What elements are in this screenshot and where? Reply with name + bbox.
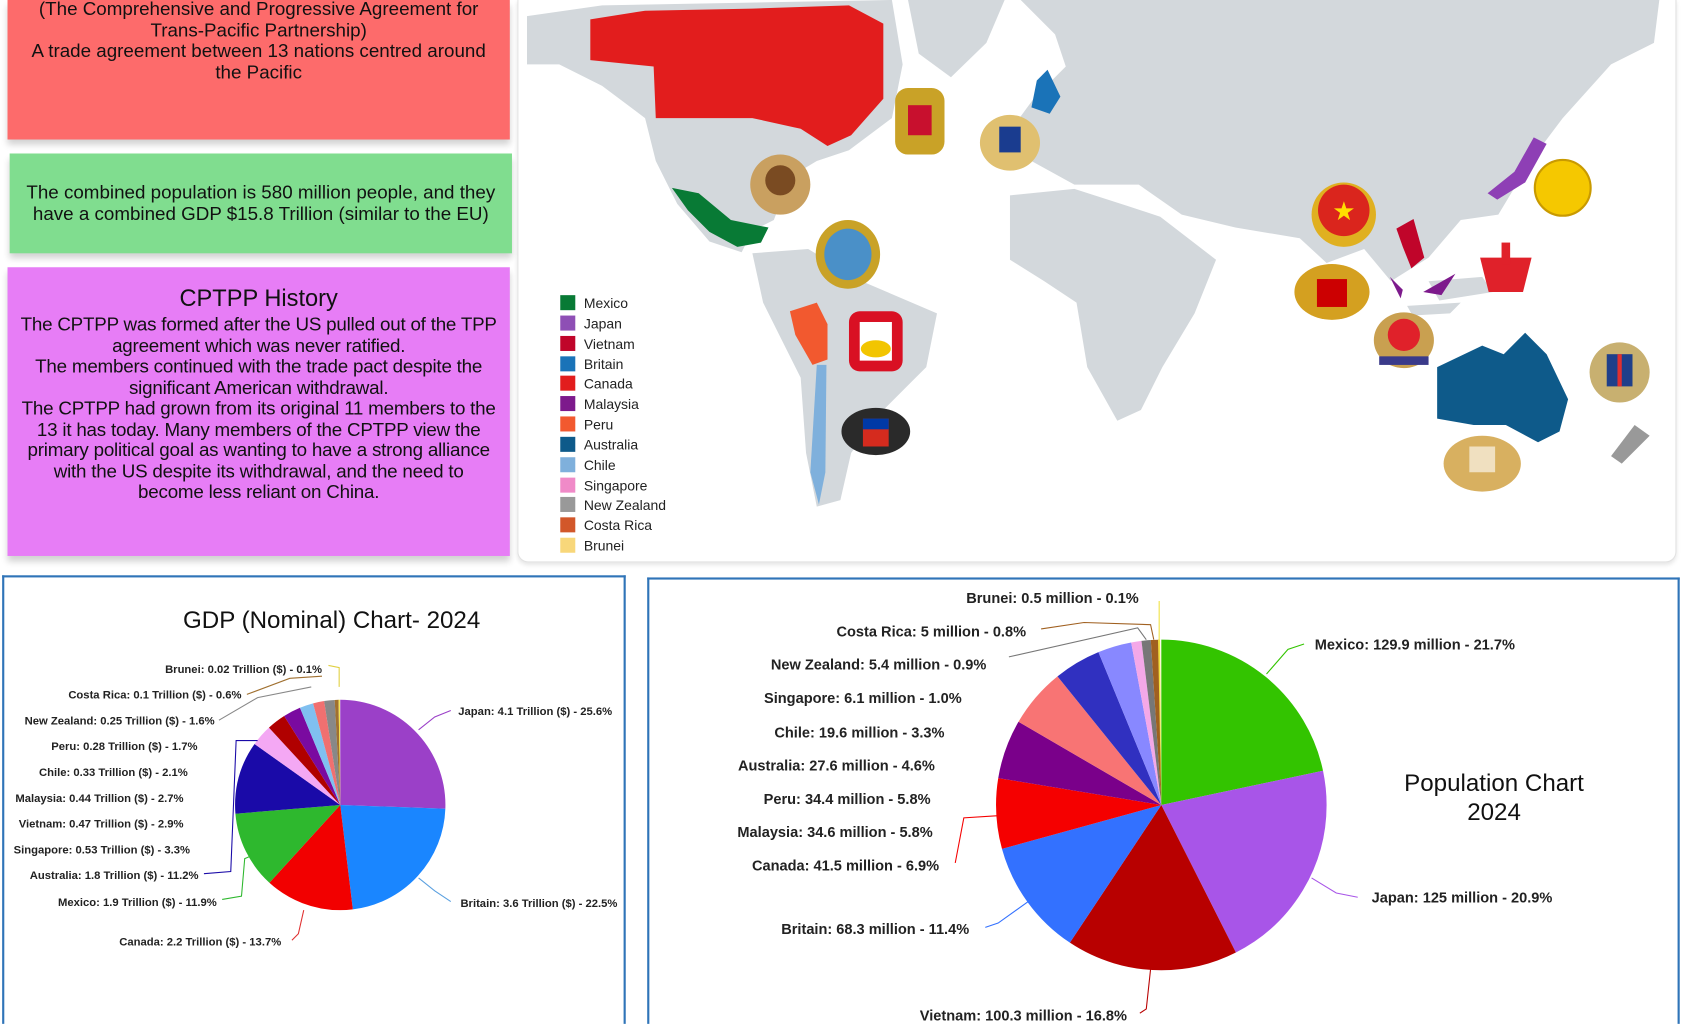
emblem: Brunei (1480, 243, 1532, 292)
legend: Canada (584, 376, 633, 392)
legend: Peru (584, 416, 613, 432)
labels GDP: Costa Rica: 0.1 Trillion ($) - 0.6% (68, 690, 241, 702)
country: Mexico (672, 188, 768, 247)
legend: Australia (584, 437, 638, 453)
labels population: Mexico: 129.9 million - 21.7% (1315, 637, 1515, 653)
emblems (750, 88, 1650, 492)
emblem: Australia (1444, 436, 1521, 492)
chart: GDP pie (288, 752, 393, 858)
country: Vietnam (1396, 219, 1424, 268)
text: history paragraph: significant American withdrawal. (129, 376, 388, 398)
emblem: UK (980, 115, 1040, 171)
text: history paragraph: The members continued with the trade pact despite the (35, 355, 482, 377)
emblem: Malaysia (1294, 264, 1370, 320)
leader lines GDP (204, 665, 451, 940)
country: Malaysia (1390, 274, 1455, 298)
text: history paragraph: primary political goal as wanting to have a strong alliance (27, 439, 490, 460)
panel: population and GDP summary (10, 153, 512, 253)
panel: population and GDP summary: have a combined GDP $15.8 Trillion (similar to the EU) (33, 202, 489, 224)
legend: Malaysia (584, 396, 639, 412)
labels GDP: Malaysia: 0.44 Trillion ($) - 2.7% (15, 793, 184, 805)
labels population: Chile: 19.6 million - 3.3% (774, 725, 945, 741)
labels GDP: Peru: 0.28 Trillion ($) - 1.7% (51, 741, 197, 753)
labels GDP: Japan: 4.1 Trillion ($) - 25.6% (458, 706, 612, 718)
labels population: New Zealand: 5.4 million - 0.9% (771, 658, 986, 674)
labels GDP: Canada: 2.2 Trillion ($) - 13.7% (119, 937, 281, 949)
legend: Britain (584, 356, 623, 372)
labels population: Costa Rica: 5 million - 0.8% (836, 624, 1026, 640)
labels population: Australia: 27.6 million - 4.6% (738, 759, 935, 775)
labels GDP (14, 664, 617, 949)
text: history paragraph (21, 313, 497, 502)
legend: Vietnam (584, 336, 635, 352)
labels population: Canada: 41.5 million - 6.9% (752, 858, 939, 874)
emblem: Mexico (750, 155, 810, 215)
country: Australia (1437, 333, 1568, 442)
legend: Mexico (584, 295, 628, 311)
labels GDP: Mexico: 1.9 Trillion ($) - 11.9% (58, 897, 217, 909)
panel: definition: A trade agreement between 13 nations centred around (32, 40, 486, 61)
country: Britain (1031, 70, 1060, 114)
country: Chile (810, 365, 826, 504)
panel: CPTPP history (8, 267, 510, 556)
country: New Zealand (1611, 425, 1650, 464)
legend: Chile (584, 457, 616, 473)
heading: population chart title: Population Chart (1404, 770, 1584, 797)
labels population: Japan: 125 million - 20.9% (1372, 891, 1552, 907)
labels GDP: New Zealand: 0.25 Trillion ($) - 1.6% (25, 715, 215, 727)
labels GDP: Brunei: 0.02 Trillion ($) - 0.1% (165, 664, 322, 676)
country: Japan (1488, 137, 1547, 200)
text: history paragraph: with the US despite its withdrawal, and the need to (54, 460, 464, 481)
emblem: Peru (849, 311, 903, 371)
legend: Costa Rica (584, 517, 652, 533)
text: history paragraph: 13 it has today. Many members of the CPTPP view the (37, 418, 480, 440)
panel: definition: Trans-Pacific Partnership) (150, 19, 367, 40)
legend: Singapore (584, 477, 648, 493)
labels population: Singapore: 6.1 million - 1.0% (764, 691, 962, 707)
panel: GDP chart (2, 575, 626, 1024)
emblem: Japan (1535, 160, 1591, 216)
country: Canada (590, 5, 883, 146)
legend (560, 295, 666, 554)
heading: CPTPP History: CPTPP History (179, 284, 338, 311)
panel: map (517, 0, 1676, 562)
legend: Japan (584, 315, 622, 331)
panel: population and GDP summary: The combined population is 580 million people, and they (26, 181, 495, 203)
panel: population chart: 2024 (1467, 799, 1521, 826)
panel: definition (8, 0, 510, 140)
leader lines population (955, 601, 1358, 1013)
legend: New Zealand (584, 497, 666, 513)
heading: GDP chart title: GDP (Nominal) Chart- 2024 (183, 607, 480, 634)
labels GDP: Britain: 3.6 Trillion ($) - 22.5% (460, 898, 617, 910)
legend: Brunei (584, 538, 624, 554)
text: history paragraph: agreement which was never ratified. (112, 334, 405, 356)
emblem: Canada (895, 88, 945, 155)
labels GDP: Singapore: 0.53 Trillion ($) - 3.3% (14, 844, 190, 856)
labels GDP: Chile: 0.33 Trillion ($) - 2.1% (39, 767, 188, 779)
emblem: Singapore (1374, 312, 1434, 368)
emblem: Vietnam: ★ (1332, 198, 1355, 226)
labels GDP: Australia: 1.8 Trillion ($) - 11.2% (30, 870, 199, 882)
country: Peru (790, 303, 828, 365)
labels population: Brunei: 0.5 million - 0.1% (966, 591, 1139, 607)
emblem: Vietnam (1312, 182, 1376, 247)
text: history paragraph: The CPTPP was formed after the US pulled out of the TPP (21, 313, 497, 335)
panel: definition: the Pacific (215, 61, 302, 82)
labels population: Britain: 68.3 million - 11.4% (781, 922, 969, 938)
panel: population chart (647, 577, 1680, 1024)
text: history paragraph: become less reliant on China. (138, 481, 379, 502)
labels population: Peru: 34.4 million - 5.8% (764, 792, 931, 808)
emblem: New Zealand (1590, 342, 1650, 402)
labels population: Malaysia: 34.6 million - 5.8% (737, 825, 933, 841)
world map landmasses (527, 0, 1659, 507)
labels population (737, 591, 1552, 1024)
labels GDP: Vietnam: 0.47 Trillion ($) - 2.9% (19, 819, 184, 831)
chart: population pie (1079, 722, 1244, 888)
text: history paragraph: The CPTPP had grown from its original 11 members to the (22, 397, 496, 419)
emblem: Chile (841, 408, 910, 455)
emblem: Costa Rica (816, 220, 880, 289)
